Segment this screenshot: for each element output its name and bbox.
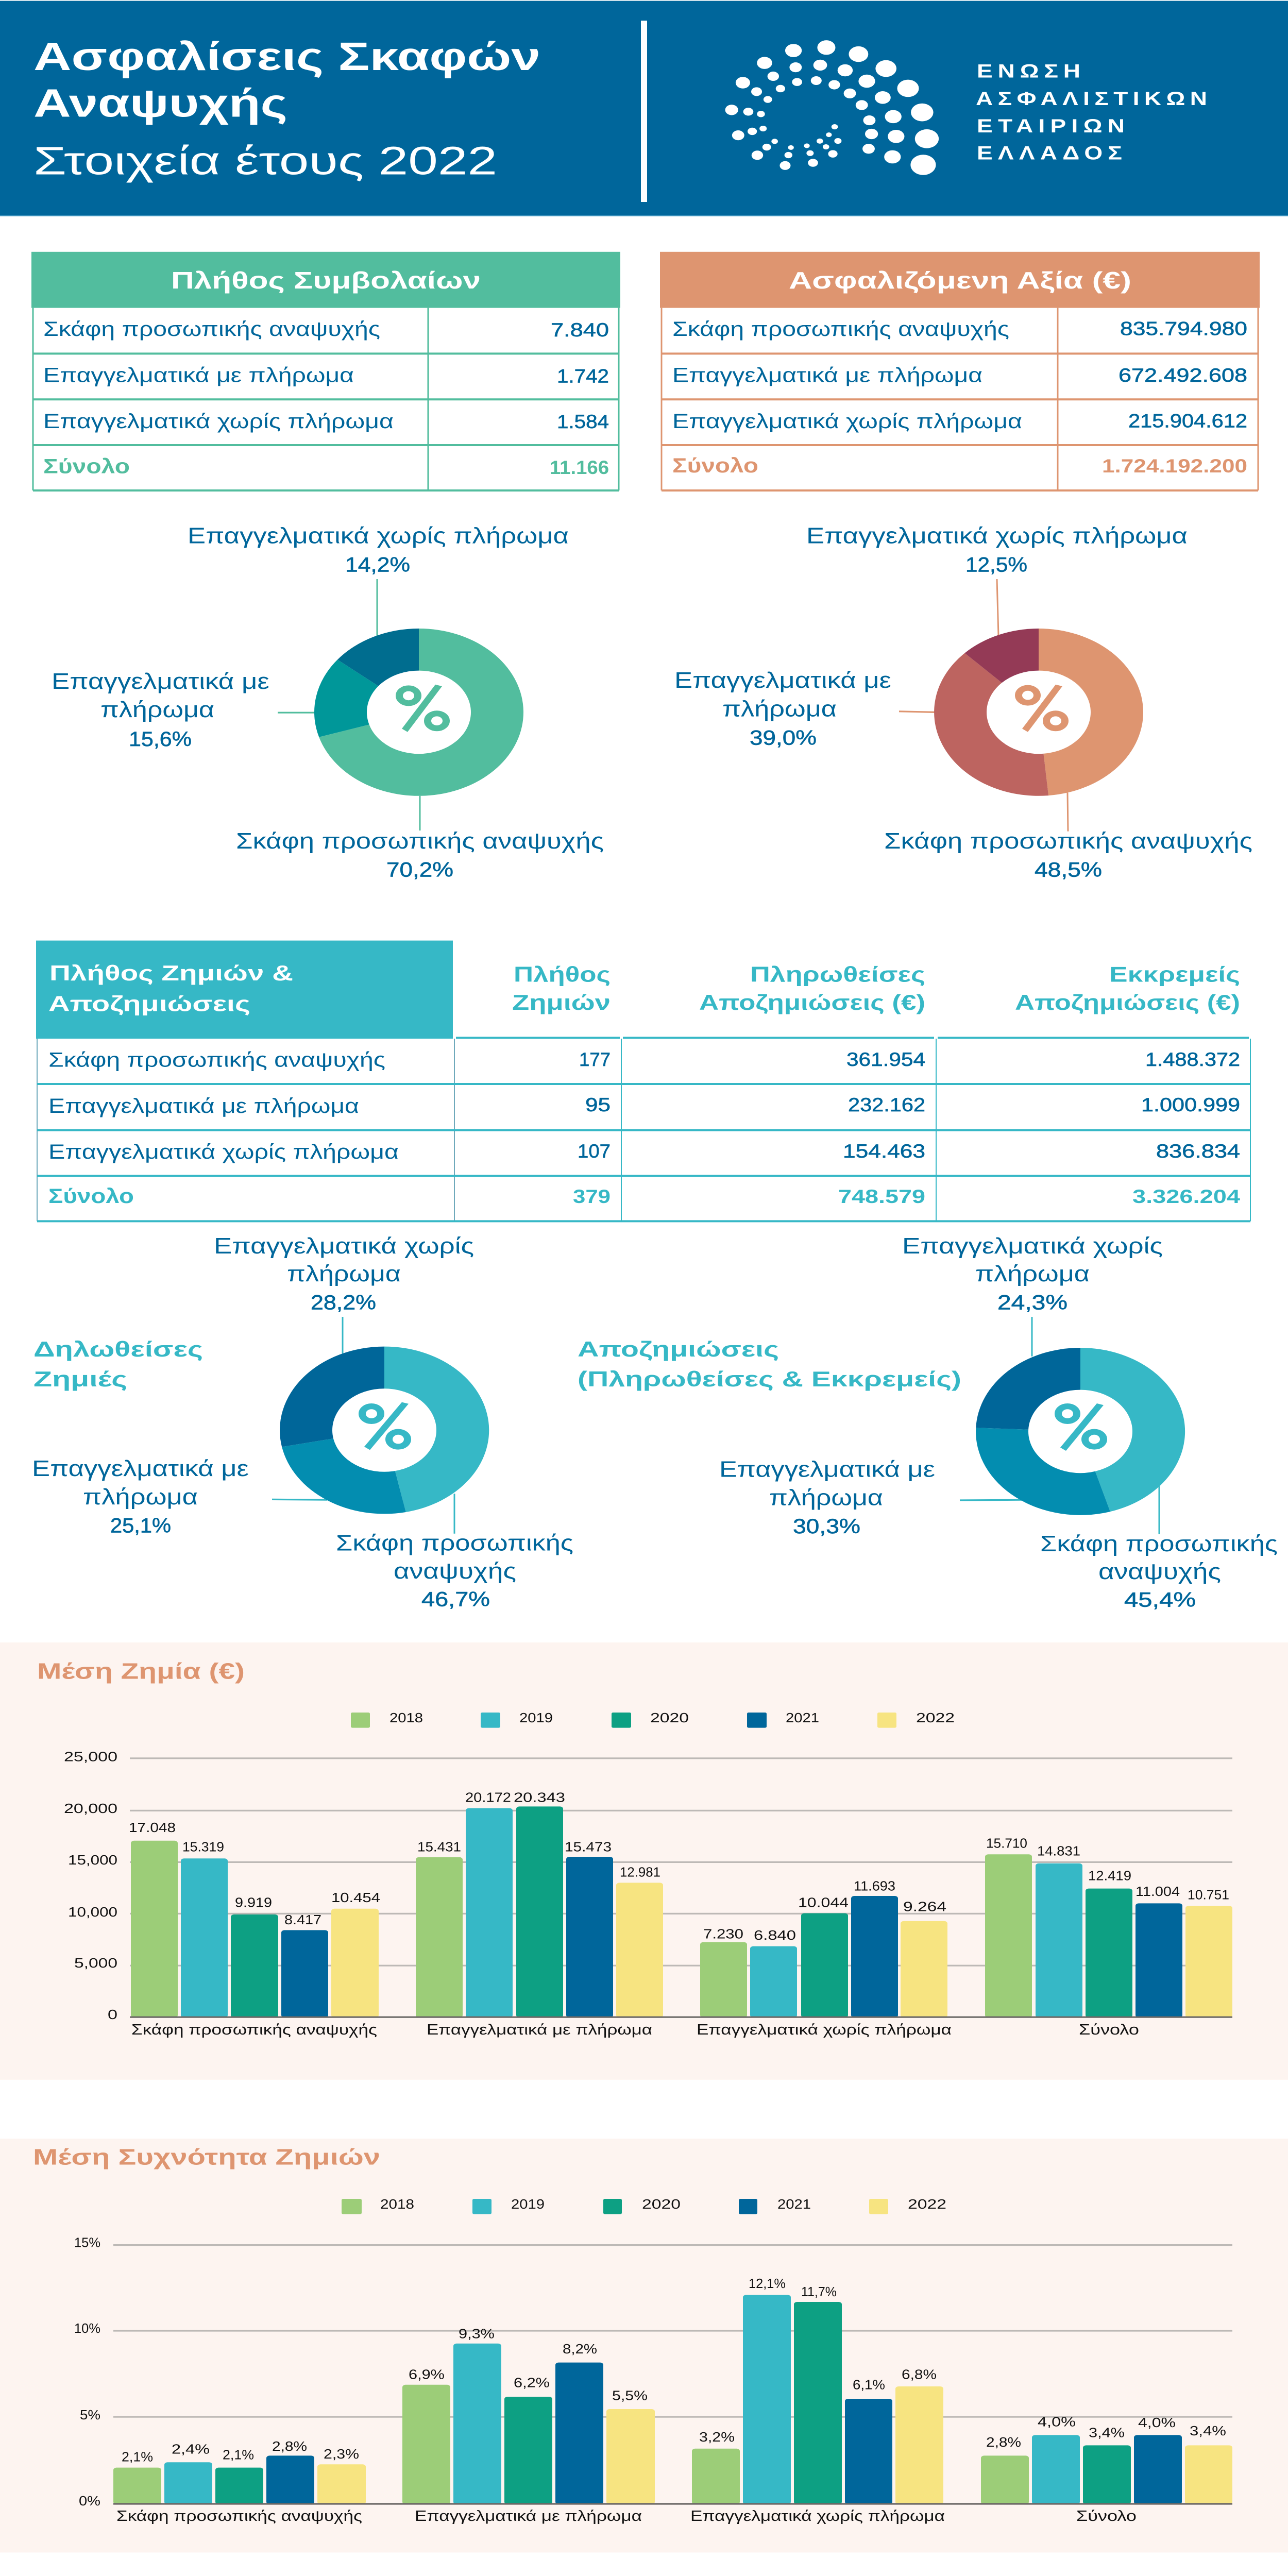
row: professional without crew: 1.584 (557, 411, 609, 432)
row: total (43, 454, 609, 478)
y axis labels: 10,000 (68, 1905, 117, 1920)
heading: average claim: Μέση Ζημία (€) (37, 1659, 245, 1684)
bars: professional without crew: 10.044 (798, 1896, 849, 1910)
row: professional with crew (43, 363, 609, 386)
label: personal 48,5%: Σκάφη προσωπικής αναψυχής (884, 829, 1252, 854)
x axis labels: Σύνολο (1079, 2021, 1139, 2038)
label: without crew 28,2%: Επαγγελματικά χωρίς (214, 1234, 474, 1259)
row: total: 1.724.192.200 (1102, 455, 1247, 477)
row: professional without crew (48, 1140, 1240, 1163)
label: without crew 24,3% (902, 1234, 1163, 1314)
label: personal 46,7% (336, 1531, 573, 1611)
legend: 2018 (389, 1711, 423, 1725)
bars: personal pleasure craft (113, 2439, 366, 2504)
panel: average claim frequency chart (0, 2139, 1288, 2552)
bars: professional with crew: 5,5% (612, 2388, 648, 2403)
heading: average claim frequency: Μέση Συχνότητα Ζημιών (33, 2145, 380, 2170)
donut chart: insured value share (899, 579, 1143, 832)
legend: 2019 (511, 2197, 545, 2212)
label: personal 45,4%: Σκάφη προσωπικής (1040, 1532, 1278, 1556)
row: professional without crew: Επαγγελματικά χωρίς πλήρωμα (48, 1140, 399, 1163)
row: personal pleasure craft: 7.840 (551, 319, 609, 341)
label: with crew 30,3%: 30,3% (793, 1515, 860, 1538)
title: Ασφαλίσεις Σκαφών (33, 35, 540, 79)
logo wordmark: ΕΤΑΙΡΙΩΝ (977, 115, 1125, 137)
row: professional with crew: 672.492.608 (1118, 364, 1247, 386)
heading: declared claims: Δηλωθείσες (33, 1337, 203, 1361)
row: personal pleasure craft: Σκάφη προσωπικής αναψυχής (48, 1048, 385, 1071)
row: total: Σύνολο (48, 1184, 134, 1208)
y axis labels: 5,000 (74, 1956, 117, 1971)
row: professional without crew (672, 410, 1247, 433)
x axis labels (131, 2021, 1139, 2038)
label: with crew 25,1%: πλήρωμα (83, 1485, 198, 1510)
row: professional without crew: 154.463 (843, 1141, 925, 1162)
title: Αναψυχής (33, 81, 287, 125)
column heading: claims count (512, 962, 611, 1014)
heading: contracts: Πλήθος Συμβολαίων (171, 267, 481, 294)
label: personal 48,5%: 48,5% (1035, 858, 1102, 881)
row: professional without crew: Επαγγελματικά χωρίς πλήρωμα (43, 410, 394, 433)
heading: compensations paid and pending (578, 1337, 961, 1391)
header banner (0, 1, 1288, 216)
label: personal 70,2%: Σκάφη προσωπικής αναψυχής (236, 829, 604, 854)
bars: professional without crew: 6,8% (902, 2368, 937, 2382)
legend: 2020 (650, 1711, 689, 1725)
y axis labels: 15% (74, 2236, 100, 2250)
icon: percent (399, 685, 446, 732)
row: professional with crew: Επαγγελματικά με πλήρωμα (672, 363, 982, 386)
column heading: paid compensations: Πληρωθείσες (750, 962, 925, 986)
bars: professional with crew (402, 2327, 655, 2504)
y axis labels: 15,000 (68, 1853, 117, 1868)
bars: professional without crew: 9.264 (903, 1900, 946, 1914)
bars: professional without crew: 6.840 (754, 1928, 796, 1943)
bars: total: 14.831 (1037, 1844, 1080, 1859)
row: professional with crew: 1.000.999 (1141, 1094, 1240, 1115)
y axis labels: 0% (79, 2494, 100, 2509)
row: professional with crew: 1.742 (557, 365, 609, 386)
bars: total: 3,4% (1190, 2424, 1226, 2438)
icon: percent (1019, 685, 1065, 732)
bars: total: 4,0% (1038, 2415, 1076, 2430)
row: professional without crew: 215.904.612 (1128, 410, 1247, 432)
row: total (672, 454, 1247, 477)
logo wordmark: ΕΛΛΑΔΟΣ (977, 142, 1122, 164)
row: total: 11.166 (550, 456, 609, 478)
label: with crew 30,3%: Επαγγελματικά με (719, 1457, 935, 1482)
bars: professional without crew: 11.693 (854, 1879, 895, 1894)
legend (342, 2197, 946, 2214)
bars: professional with crew: 15.473 (565, 1840, 612, 1855)
donut chart: compensations share (960, 1317, 1185, 1534)
label: personal 70,2% (236, 829, 604, 881)
x axis labels: Σύνολο (1076, 2507, 1137, 2524)
bars: total: 12.419 (1088, 1869, 1131, 1884)
title (33, 35, 540, 125)
bars: total: 2,8% (986, 2435, 1021, 2450)
row: professional without crew (43, 410, 609, 433)
heading: insured value: Ασφαλιζόμενη Αξία (€) (789, 267, 1131, 294)
legend (351, 1711, 955, 1728)
bars: professional with crew: 15.431 (417, 1840, 461, 1855)
column heading: pending compensations (1015, 962, 1240, 1014)
panel: contracts count table (31, 252, 620, 490)
x axis labels: Σκάφη προσωπικής αναψυχής (131, 2021, 377, 2038)
label: without crew 24,3%: πλήρωμα (975, 1262, 1090, 1286)
label: with crew 25,1% (32, 1456, 249, 1537)
bars: professional with crew: 20.172 (465, 1791, 511, 1805)
label: with crew 15,6% (52, 669, 269, 751)
label: without crew 28,2% (214, 1234, 474, 1314)
label: personal 48,5% (884, 829, 1252, 881)
column heading: paid compensations (699, 962, 925, 1014)
legend: 2021 (777, 2197, 811, 2212)
heading: claims and compensations (48, 961, 293, 1015)
logo wordmark: ΑΣΦΑΛΙΣΤΙΚΩΝ (976, 88, 1207, 109)
bars: professional with crew: 6,2% (514, 2376, 550, 2391)
icon: percent (362, 1402, 409, 1450)
x axis labels: Επαγγελματικά με πλήρωμα (415, 2507, 642, 2524)
heading: declared claims: Ζημιές (33, 1367, 127, 1391)
row: personal pleasure craft: 361.954 (846, 1048, 925, 1070)
label: with crew 39,0%: πλήρωμα (722, 697, 837, 721)
y axis labels: 5% (80, 2408, 100, 2422)
label: personal 70,2%: 70,2% (386, 858, 453, 881)
heading: declared claims (33, 1337, 203, 1391)
bars: personal pleasure craft: 2,3% (324, 2447, 359, 2462)
row: professional with crew: Επαγγελματικά με πλήρωμα (43, 363, 354, 386)
bars: total: 10.751 (1188, 1888, 1229, 1903)
label: personal 45,4%: αναψυχής (1098, 1560, 1221, 1584)
bars: professional with crew: 12.981 (620, 1865, 660, 1880)
panel: claims and compensations table (36, 941, 1250, 1221)
row: total: Σύνολο (672, 454, 758, 477)
bars: professional with crew: 20.343 (514, 1791, 565, 1805)
bars: total: 11.004 (1136, 1885, 1180, 1899)
row: professional with crew: 95 (585, 1094, 611, 1115)
y axis labels (74, 2236, 100, 2509)
legend: 2021 (786, 1711, 819, 1725)
donut chart: contracts share (278, 579, 523, 831)
bars: total (985, 1836, 1232, 2018)
bars: professional with crew: 6,9% (409, 2368, 445, 2382)
label: with crew 39,0% (674, 668, 891, 749)
column heading: pending compensations: Εκκρεμείς (1109, 962, 1240, 986)
column heading: pending compensations: Αποζημιώσεις (€) (1015, 990, 1240, 1014)
bars: professional without crew (700, 1879, 947, 2018)
legend: 2022 (916, 1711, 955, 1725)
bars: total: 3,4% (1089, 2426, 1125, 2441)
row: personal pleasure craft: 835.794.980 (1120, 318, 1247, 339)
label: without crew 14,2% (188, 523, 569, 576)
bars: professional without crew: 11,7% (801, 2285, 837, 2299)
heading: compensations paid and pending: Αποζημιώσεις (578, 1337, 779, 1361)
label: personal 46,7%: Σκάφη προσωπικής (336, 1531, 573, 1555)
bars: professional without crew (692, 2277, 943, 2504)
row: personal pleasure craft (48, 1048, 1240, 1071)
bars: personal pleasure craft: 17.048 (129, 1821, 176, 1835)
row: personal pleasure craft: 1.488.372 (1145, 1048, 1240, 1070)
row: personal pleasure craft: 177 (579, 1048, 611, 1070)
row: professional without crew: 836.834 (1156, 1141, 1240, 1162)
bars: personal pleasure craft: 2,1% (122, 2450, 153, 2465)
label: personal 46,7%: 46,7% (421, 1587, 490, 1611)
legend: 2019 (519, 1711, 553, 1725)
label: without crew 14,2%: Επαγγελματικά χωρίς πλήρωμα (188, 523, 569, 548)
row: total: 379 (573, 1186, 611, 1207)
logo wordmark: ΕΝΩΣΗ (977, 60, 1080, 81)
label: without crew 28,2%: 28,2% (311, 1291, 376, 1314)
row: professional with crew (48, 1094, 1240, 1117)
bars: total: 15.710 (986, 1836, 1027, 1851)
icon: percent (1058, 1403, 1104, 1451)
bars: professional with crew (416, 1791, 663, 2018)
row: personal pleasure craft: Σκάφη προσωπικής αναψυχής (672, 317, 1009, 341)
bars: personal pleasure craft: 15.319 (182, 1840, 224, 1855)
panel: insured value table (660, 252, 1260, 490)
row: professional with crew (672, 363, 1247, 386)
column heading: claims count: Ζημιών (512, 990, 611, 1014)
label: with crew 30,3%: πλήρωμα (769, 1486, 883, 1510)
label: with crew 15,6%: πλήρωμα (100, 698, 214, 722)
label: personal 46,7%: αναψυχής (394, 1559, 516, 1584)
label: without crew 24,3%: 24,3% (997, 1291, 1067, 1314)
bars: personal pleasure craft: 2,1% (223, 2448, 254, 2463)
row: professional without crew: Επαγγελματικά χωρίς πλήρωμα (672, 410, 1022, 433)
bars: personal pleasure craft: 2,4% (172, 2442, 210, 2457)
y axis labels (64, 1750, 117, 2022)
bars: professional without crew: 12,1% (749, 2277, 786, 2291)
row: total: 3.326.204 (1132, 1186, 1240, 1207)
bars: personal pleasure craft: 2,8% (272, 2439, 307, 2454)
column heading: paid compensations: Αποζημιώσεις (€) (699, 990, 925, 1014)
row: total: 748.579 (838, 1186, 925, 1207)
bars: professional with crew: 8,2% (563, 2342, 597, 2357)
bars: professional with crew: 9,3% (459, 2327, 495, 2342)
x axis labels (116, 2507, 1137, 2524)
panel: average claim chart (0, 1642, 1288, 2080)
label: with crew 39,0%: 39,0% (750, 726, 817, 749)
label: without crew 14,2%: 14,2% (345, 553, 410, 576)
row: total: Σύνολο (43, 454, 130, 478)
label: without crew 24,3%: Επαγγελματικά χωρίς (902, 1234, 1163, 1259)
row: personal pleasure craft (672, 317, 1247, 341)
label: with crew 25,1%: 25,1% (110, 1514, 171, 1537)
label: personal 45,4% (1040, 1532, 1278, 1611)
bars: personal pleasure craft: 10.454 (331, 1891, 380, 1905)
heading: claims and compensations: Αποζημιώσεις (48, 991, 250, 1015)
bars: professional without crew: 3,2% (699, 2430, 735, 2445)
bars: total (981, 2415, 1232, 2504)
legend: 2022 (908, 2197, 946, 2212)
heading: compensations paid and pending: (Πληρωθείσες & Εκκρεμείς) (578, 1367, 961, 1391)
x axis labels: Επαγγελματικά με πλήρωμα (427, 2021, 652, 2038)
y axis labels: 0 (108, 2008, 117, 2022)
row: personal pleasure craft (43, 317, 609, 341)
label: with crew 30,3% (719, 1457, 935, 1538)
label: without crew 28,2%: πλήρωμα (287, 1262, 401, 1286)
column heading: claims count: Πλήθος (514, 962, 611, 986)
x axis labels: Επαγγελματικά χωρίς πλήρωμα (690, 2507, 945, 2524)
y axis labels: 25,000 (64, 1750, 117, 1765)
x axis labels: Επαγγελματικά χωρίς πλήρωμα (697, 2021, 952, 2038)
subtitle: Στοιχεία έτους 2022 (33, 139, 497, 183)
legend: 2020 (642, 2197, 681, 2212)
label: without crew 12,5%: 12,5% (965, 553, 1027, 576)
label: with crew 39,0%: Επαγγελματικά με (674, 668, 891, 693)
bars: personal pleasure craft: 8.417 (284, 1913, 321, 1927)
label: with crew 15,6%: Επαγγελματικά με (52, 669, 269, 694)
label: without crew 12,5%: Επαγγελματικά χωρίς πλήρωμα (806, 523, 1188, 548)
bars: personal pleasure craft: 9.919 (235, 1896, 272, 1910)
row: total (48, 1184, 1240, 1208)
row: professional with crew: Επαγγελματικά με πλήρωμα (48, 1094, 359, 1117)
label: personal 45,4%: 45,4% (1124, 1588, 1196, 1611)
legend: 2018 (380, 2197, 414, 2212)
bars: professional without crew: 7.230 (703, 1927, 743, 1942)
label: without crew 12,5% (806, 523, 1188, 576)
y axis labels: 20,000 (64, 1802, 117, 1816)
donut chart: declared claims share (272, 1317, 489, 1534)
bars: personal pleasure craft (129, 1821, 380, 2018)
label: with crew 25,1%: Επαγγελματικά με (32, 1456, 249, 1481)
icon: association logo dots (725, 40, 939, 175)
logo wordmark (976, 60, 1207, 164)
bars: total: 4,0% (1138, 2416, 1176, 2430)
bars: professional without crew: 6,1% (853, 2378, 885, 2393)
y axis labels: 10% (74, 2321, 100, 2336)
label: with crew 15,6%: 15,6% (129, 727, 192, 751)
row: personal pleasure craft: Σκάφη προσωπικής αναψυχής (43, 317, 380, 341)
row: professional without crew: 107 (578, 1141, 611, 1162)
heading: claims and compensations: Πλήθος Ζημιών & (49, 961, 293, 985)
x axis labels: Σκάφη προσωπικής αναψυχής (116, 2507, 362, 2524)
row: professional with crew: 232.162 (848, 1094, 925, 1115)
